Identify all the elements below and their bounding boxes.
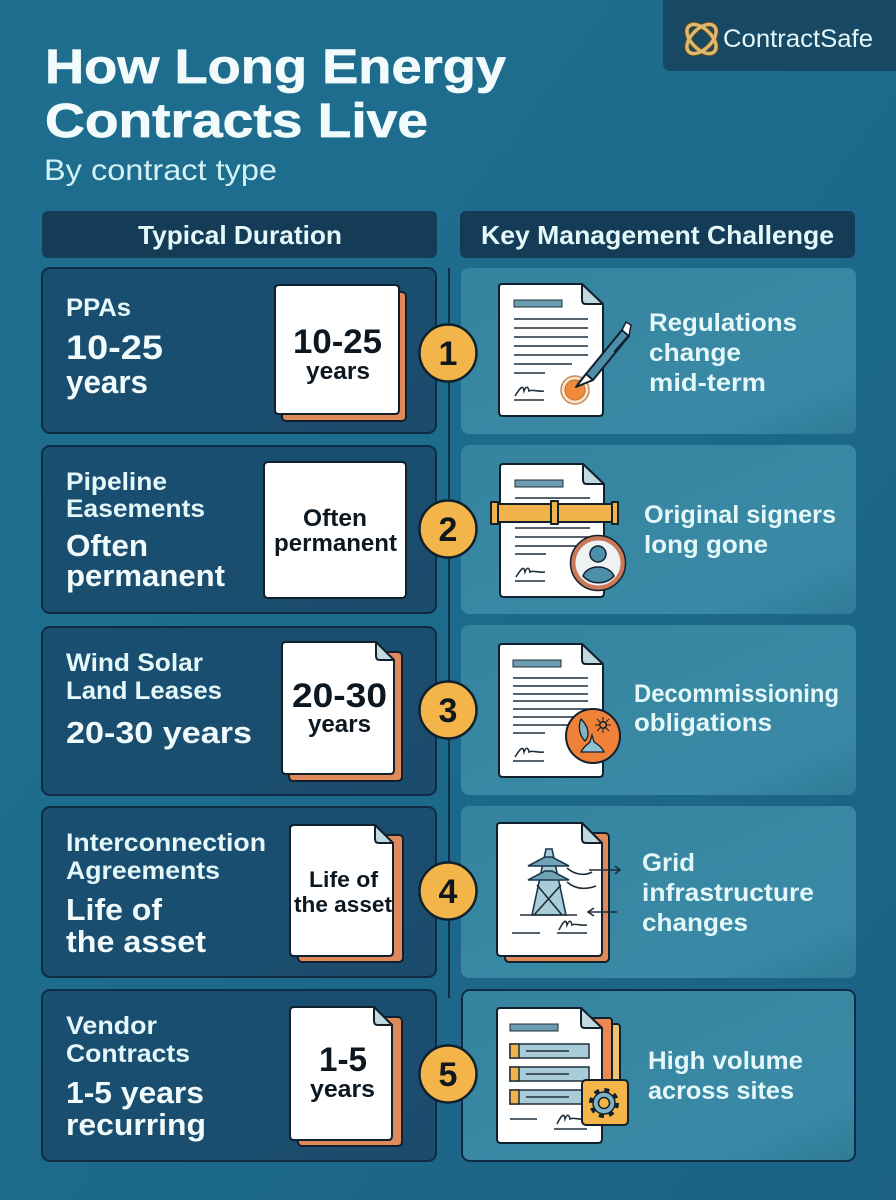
panel: PPAs duration: PPAs (66, 294, 131, 322)
panel: Vendor Contracts duration (42, 990, 436, 1161)
panel: Pipeline Easements duration: Easements (66, 495, 205, 523)
panel: Interconnection Agreements duration: Life of (66, 892, 163, 927)
number badge 4: 4 (439, 873, 458, 911)
card: 10-25 years: 10-25 (293, 323, 382, 361)
number badge 1 (420, 324, 476, 382)
card: often permanent: Often (303, 505, 367, 532)
panel: volume challenge: High volume (648, 1047, 803, 1075)
panel: regulations challenge (461, 268, 856, 434)
number badge 3: 3 (439, 692, 457, 730)
panel: PPAs duration: years (66, 364, 148, 400)
header: typical duration: Typical Duration (138, 220, 342, 250)
panel: decommissioning challenge (461, 625, 856, 795)
subtitle: By contract type (44, 154, 277, 187)
card: life of the asset: Life of (309, 867, 379, 892)
panel: Pipeline Easements duration (42, 446, 436, 613)
card: 20-30 years (282, 642, 402, 781)
panel: regulations challenge: mid-term (649, 369, 766, 397)
panel: PPAs duration (42, 268, 436, 433)
header: typical duration (42, 211, 437, 258)
panel: grid challenge: changes (642, 909, 748, 937)
panel: decommissioning challenge: obligations (634, 709, 772, 737)
panel: Vendor Contracts duration: recurring (66, 1107, 206, 1142)
panel: Interconnection Agreements duration: the asset (66, 924, 206, 959)
panel: grid challenge (461, 806, 856, 978)
card: 10-25 years (275, 285, 406, 421)
card: 20-30 years: 20-30 (292, 677, 387, 715)
icon: document with pipeline and person (491, 464, 626, 597)
card: 1-5 years (290, 1007, 402, 1146)
card: often permanent: permanent (274, 530, 397, 557)
title: Contracts Live (45, 95, 428, 148)
panel: Wind Solar Land Leases duration: Wind Solar (66, 649, 203, 677)
center divider line (448, 268, 450, 998)
panel: signers challenge (461, 445, 856, 614)
logo panel: ContractSafe (723, 25, 873, 53)
card: often permanent (264, 462, 406, 598)
panel: Pipeline Easements duration: Often (66, 528, 148, 563)
panel: regulations challenge: change (649, 339, 741, 367)
panel: PPAs duration: 10-25 (66, 329, 163, 367)
number badge 3 (420, 682, 476, 738)
panel: Interconnection Agreements duration: Agreements (66, 857, 220, 885)
card: 10-25 years: years (306, 358, 370, 385)
number badge 2 (420, 500, 476, 558)
title (45, 41, 506, 148)
icon: document stack with gear (497, 1008, 628, 1143)
icon: document with decommissioning badge (499, 644, 620, 777)
panel: Pipeline Easements duration: permanent (66, 558, 225, 593)
panel: Interconnection Agreements duration: Interconnection (66, 829, 266, 857)
panel: decommissioning challenge: Decommissioning (634, 680, 839, 708)
panel: signers challenge: long gone (644, 531, 768, 559)
panel: regulations challenge: Regulations (649, 309, 797, 337)
card: life of the asset: the asset (294, 892, 393, 917)
panel: Vendor Contracts duration: Contracts (66, 1040, 190, 1068)
title: How Long Energy (45, 41, 506, 94)
number badge 1: 1 (439, 335, 457, 373)
logo panel (663, 0, 896, 71)
panel: Interconnection Agreements duration (42, 807, 436, 977)
panel: volume challenge: across sites (648, 1077, 794, 1105)
number badge 5: 5 (439, 1056, 457, 1094)
icon: document with transmission tower (497, 823, 620, 962)
number badge 5 (420, 1046, 476, 1102)
card: 1-5 years: 1-5 (319, 1041, 367, 1079)
number badge 2: 2 (439, 511, 457, 549)
panel: Vendor Contracts duration: Vendor (66, 1012, 157, 1040)
number badge 4 (420, 862, 476, 920)
card: life of the asset (290, 825, 403, 962)
panel: Wind Solar Land Leases duration: 20-30 years (66, 715, 252, 750)
panel: Pipeline Easements duration: Pipeline (66, 468, 167, 496)
icon: signed document with pen (499, 284, 631, 416)
panel: Wind Solar Land Leases duration: Land Leases (66, 677, 222, 705)
card: 1-5 years: years (310, 1076, 375, 1103)
header: key management challenge (460, 211, 855, 258)
panel: grid challenge: Grid (642, 849, 695, 877)
panel: signers challenge: Original signers (644, 501, 836, 529)
header: key management challenge: Key Management Challenge (481, 220, 834, 250)
panel: volume challenge (462, 990, 855, 1161)
panel: Vendor Contracts duration: 1-5 years (66, 1075, 204, 1110)
card: 20-30 years: years (308, 711, 371, 738)
panel: Wind Solar Land Leases duration (42, 627, 436, 795)
icon: ContractSafe logo (682, 19, 721, 59)
panel: grid challenge: infrastructure (642, 879, 814, 907)
